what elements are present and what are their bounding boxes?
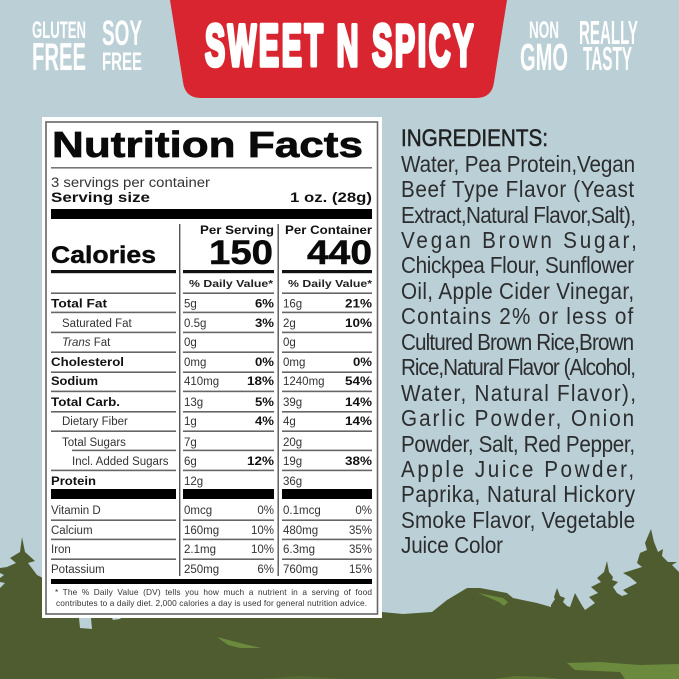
badge: really tasty: [579, 14, 638, 77]
nutrient rows: 5%: [255, 397, 274, 409]
vitamin and mineral rows: 15%: [349, 564, 372, 576]
vitamin and mineral rows: 35%: [349, 525, 372, 537]
nutrient rows: Trans Fat: [62, 337, 111, 349]
light patch: center meadow: [217, 637, 261, 648]
nutrient rows: 0g: [283, 337, 296, 349]
nutrient rows: 7g: [184, 437, 197, 449]
nutrient rows: Total Carb.: [51, 397, 120, 409]
badge: non gmo: GMO: [520, 37, 568, 79]
heading: Nutrition Facts: [52, 124, 363, 165]
vitamin and mineral rows: 250mg: [184, 564, 219, 576]
table row rules: [51, 292, 372, 560]
vitamin and mineral rows: 0%: [257, 505, 274, 517]
nutrient rows: Sodium: [51, 376, 98, 388]
vitamin and mineral rows: 35%: [349, 544, 372, 556]
vitamin and mineral rows: 6%: [257, 564, 274, 576]
nutrient rows: 39g: [283, 397, 302, 409]
nutrient rows: 16g: [283, 298, 302, 310]
nutrient rows: 0%: [255, 357, 274, 369]
calories section: % Daily Value*: [288, 278, 373, 290]
banner title: SWEET N SPICY: [205, 13, 473, 78]
footnote: [55, 587, 372, 608]
ingredients list: Powder, Salt, Red Pepper,: [401, 431, 635, 457]
nutrient rows: 4%: [255, 416, 274, 428]
nutrient rows: 0g: [184, 337, 197, 349]
panel: nutrition facts: [42, 117, 382, 618]
nutrient rows: 0mg: [283, 357, 305, 369]
ingredients block: [401, 125, 637, 558]
nutrient rows: 12g: [184, 476, 203, 488]
ingredients list: Paprika, Natural Hickory: [401, 481, 636, 507]
nutrient rows: Cholesterol: [51, 357, 124, 369]
nutrient rows: 5g: [184, 298, 197, 310]
nutrient rows: 20g: [283, 437, 302, 449]
badge: non gmo: [520, 17, 568, 79]
nutrient rows: 3%: [255, 318, 274, 330]
vitamin and mineral rows: 2.1mg: [184, 544, 216, 556]
vitamin and mineral rows: 0%: [355, 505, 372, 517]
nutrient rows: Dietary Fiber: [62, 416, 128, 428]
column dividers: [179, 224, 279, 576]
nutrient rows: 0mg: [184, 357, 206, 369]
servings: 3 servings per container: [51, 175, 211, 190]
ingredients list: Cultured Brown Rice,Brown: [401, 329, 634, 355]
footnote: * The % Daily Value (DV) tells you how much a nutrient in a serving of food: [55, 587, 372, 597]
nutrient rows: Total Fat: [51, 298, 107, 310]
calories section: % Daily Value*: [189, 278, 274, 290]
ingredients list: Garlic Powder, Onion: [401, 405, 634, 431]
light patch: hill: [478, 593, 508, 606]
badge: soy free: SOY: [102, 14, 142, 53]
nutrient rows: 0.5g: [184, 318, 206, 330]
nutrient rows: 1240mg: [283, 376, 325, 388]
vitamin and mineral rows: Calcium: [51, 525, 93, 537]
nutrient rows: Total Sugars: [62, 437, 126, 449]
nutrient rows: 38%: [345, 456, 372, 468]
ingredients heading: INGREDIENTS:: [401, 125, 548, 152]
vitamin and mineral rows: 6.3mg: [283, 544, 315, 556]
nutrient rows: 21%: [345, 298, 372, 310]
ingredients list: Apple Juice Powder,: [401, 456, 634, 482]
vitamin and mineral rows: 0mcg: [184, 505, 212, 517]
servings: Serving size: [51, 190, 151, 205]
nutrient rows: 36g: [283, 476, 302, 488]
forest landscape: [0, 529, 679, 679]
servings: [51, 175, 372, 205]
ingredients list: Extract,Natural Flavor,Salt),: [401, 202, 636, 228]
nutrient rows: 410mg: [184, 376, 219, 388]
light patch: lower meadow: [262, 676, 346, 679]
calories section: Per Serving: [200, 225, 274, 237]
vitamin and mineral rows: 160mg: [184, 525, 219, 537]
nutrient rows: 19g: [283, 456, 302, 468]
nutrient rows: 14%: [345, 397, 372, 409]
nutrient rows: 0%: [353, 357, 372, 369]
vitamin and mineral rows: 480mg: [283, 525, 318, 537]
vitamin and mineral rows: Iron: [51, 544, 71, 556]
nutrient rows: 6g: [184, 456, 197, 468]
badge: gluten free: GLUTEN: [32, 17, 86, 44]
ingredients list: [401, 151, 637, 558]
badge: soy free: [102, 14, 142, 76]
badge: gluten free: FREE: [32, 36, 86, 79]
light patch: bottom meadow: [493, 676, 560, 679]
nutrient rows: 1g: [184, 416, 197, 428]
badge: soy free: FREE: [102, 48, 142, 76]
tree: left pine: [0, 537, 43, 620]
vitamin and mineral rows: 760mg: [283, 564, 318, 576]
nutrient rows: Protein: [51, 476, 96, 488]
vitamin and mineral rows: Potassium: [51, 564, 105, 576]
ingredients list: Oil, Apple Cider Vinegar,: [401, 278, 634, 304]
nutrient rows: 54%: [345, 376, 372, 388]
nutrient rows: Incl. Added Sugars: [72, 456, 169, 468]
calories section: Calories: [51, 242, 156, 269]
hills and right pines: [0, 529, 679, 679]
vitamin and mineral rows: [51, 505, 372, 576]
calories section: Per Container: [285, 225, 373, 237]
nutrient rows: Saturated Fat: [62, 318, 132, 330]
red flavor banner: [170, 0, 507, 98]
badge: gluten free: [32, 17, 86, 79]
nutrient rows: 13g: [184, 397, 203, 409]
nutrient rows: 6%: [255, 298, 274, 310]
vitamin and mineral rows: 10%: [251, 525, 274, 537]
ingredients list: Vegan Brown Sugar,: [401, 227, 637, 253]
nutrient rows: 4g: [283, 416, 296, 428]
ingredients list: Smoke Flavor, Vegetable: [401, 507, 635, 533]
vitamin and mineral rows: 0.1mcg: [283, 505, 321, 517]
black separator bars: [51, 489, 372, 499]
calories section: 440: [307, 234, 372, 272]
ingredients list: Contains 2% or less of: [401, 303, 634, 329]
light patch: right meadow: [567, 662, 679, 679]
ingredients list: Water, Pea Protein,Vegan: [401, 151, 635, 177]
servings: 1 oz. (28g): [290, 190, 372, 205]
ingredients list: Water, Natural Flavor),: [401, 380, 636, 406]
ingredients list: Juice Color: [401, 532, 503, 558]
vitamin and mineral rows: 10%: [251, 544, 274, 556]
nutrient rows: 12%: [247, 456, 274, 468]
footnote: contributes to a daily diet. 2,000 calories a day is used for general nutrition advice.: [56, 598, 367, 608]
ingredients list: Chickpea Flour, Sunflower: [401, 252, 634, 278]
nutrient rows: 18%: [247, 376, 274, 388]
ingredients list: Rice,Natural Flavor (Alcohol,: [401, 354, 636, 380]
nutrient rows: 2g: [283, 318, 296, 330]
vitamin and mineral rows: Vitamin D: [51, 505, 101, 517]
nutrient rows: 14%: [345, 416, 372, 428]
calories section: 150: [209, 234, 273, 272]
ingredients list: Beef Type Flavor (Yeast: [401, 176, 634, 202]
badge: non gmo: NON: [529, 17, 559, 44]
nutrient rows: [51, 298, 372, 488]
nutrient rows: 10%: [345, 318, 372, 330]
calories section: [51, 225, 373, 290]
